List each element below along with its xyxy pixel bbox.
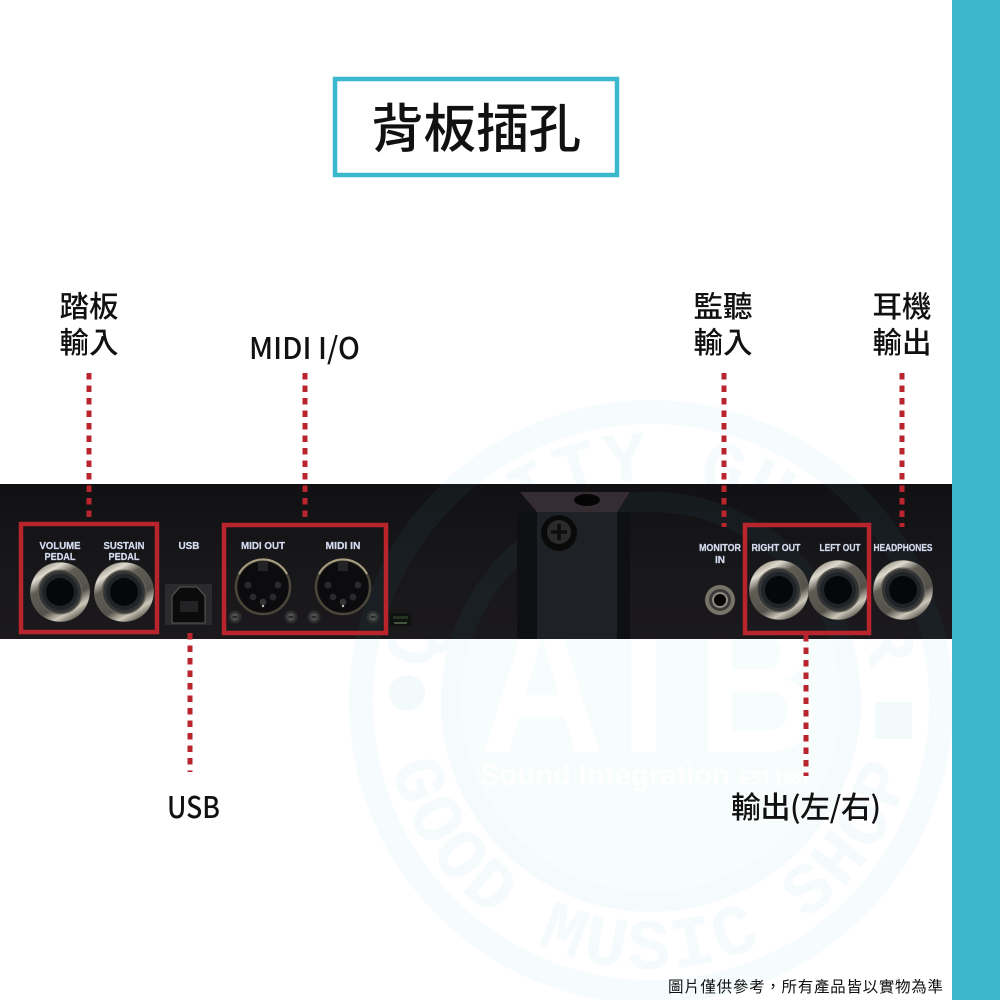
label: headphones output: 輸出 xyxy=(872,320,932,362)
title: boxed heading xyxy=(335,79,617,175)
dotted leader: USB xyxy=(188,633,192,772)
highlight box: pedal inputs xyxy=(21,524,157,632)
dotted leader: MIDI xyxy=(302,373,308,523)
jack: monitor in: MONITOR xyxy=(699,543,742,554)
jack: headphones xyxy=(873,543,933,620)
watermark: shop seal behind the content: EST.1987 xyxy=(740,768,810,790)
label: USB: USB xyxy=(167,783,220,827)
jacks: volume and sustain pedal: SUSTAIN xyxy=(104,541,144,552)
USB port: USB xyxy=(178,541,200,552)
jacks: right and left out: RIGHT OUT xyxy=(752,543,800,554)
dotted leader: headphones xyxy=(900,373,904,527)
label: headphones output xyxy=(872,284,932,362)
watermark: shop seal behind the content: GOOD MUSIC SHOP xyxy=(396,760,900,970)
watermark tint over the panel xyxy=(391,484,918,560)
footer note: 圖片僅供參考，所有產品皆以實物為準 xyxy=(668,975,943,997)
small green connector xyxy=(390,613,411,626)
jacks: volume and sustain pedal: PEDAL xyxy=(44,552,76,563)
label: pedal input xyxy=(59,284,119,362)
jacks: right and left out: LEFT OUT xyxy=(820,543,860,554)
label: output left and right: 輸出(左/右) xyxy=(731,783,881,827)
highlight box: MIDI xyxy=(224,525,386,633)
MIDI ports: MIDI IN xyxy=(326,541,360,552)
mounting bracket with screw xyxy=(517,492,630,639)
highlight box: outputs xyxy=(745,525,869,633)
label: pedal input: 輸入 xyxy=(59,320,119,362)
watermark: shop seal behind the content: ATB xyxy=(480,572,820,795)
label: MIDI I/O: MIDI I/O xyxy=(249,324,360,368)
title: boxed heading: 背板插孔 xyxy=(371,87,581,163)
MIDI ports xyxy=(228,541,380,624)
USB port xyxy=(165,541,212,625)
MIDI ports: MIDI OUT xyxy=(241,541,285,552)
dotted leader: pedal xyxy=(86,373,92,522)
jack: monitor in: IN xyxy=(715,555,725,566)
dotted leader: monitor xyxy=(722,373,726,527)
label: headphones output: 耳機 xyxy=(872,284,932,326)
jacks: volume and sustain pedal: PEDAL xyxy=(108,552,140,563)
label: pedal input: 踏板 xyxy=(59,284,119,326)
watermark: shop seal behind the content xyxy=(349,400,952,1000)
label: monitor input: 監聽 xyxy=(693,284,753,326)
panel: keyboard rear panel photo xyxy=(0,484,952,639)
label: monitor input xyxy=(693,284,753,362)
sidebar: teal right strip xyxy=(952,0,1000,1000)
watermark: shop seal behind the content: Sound Integration xyxy=(480,759,730,792)
dotted leader: output xyxy=(804,635,808,776)
jacks: right and left out xyxy=(749,543,868,620)
jack: headphones: HEADPHONES xyxy=(874,543,933,554)
jacks: volume and sustain pedal: VOLUME xyxy=(40,541,81,552)
jack: monitor in xyxy=(699,543,742,615)
label: monitor input: 輸入 xyxy=(693,320,753,362)
watermark: shop seal behind the content: QUALITY GUITAR xyxy=(388,432,913,668)
jacks: volume and sustain pedal xyxy=(30,541,154,622)
